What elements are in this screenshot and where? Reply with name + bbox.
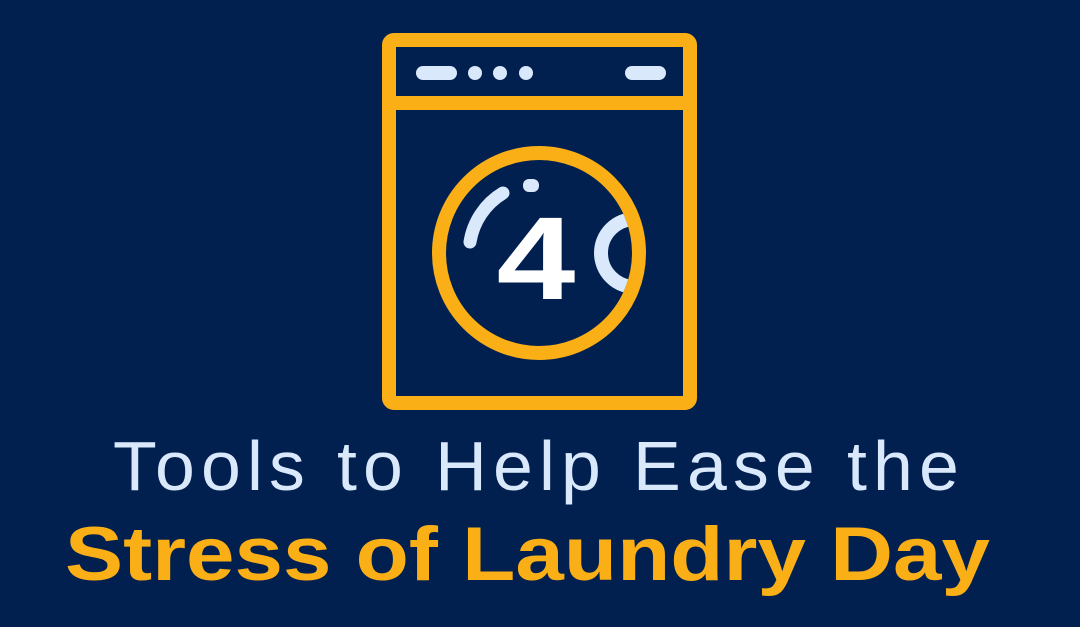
door with number 4: 4 (497, 192, 575, 324)
title line 2: Stress of Laundry Day (65, 512, 990, 597)
icon: washing machine (389, 40, 690, 403)
title line 1: Tools to Help Ease the (113, 427, 965, 505)
control panel buttons (416, 66, 666, 80)
door with number 4 (439, 153, 669, 353)
